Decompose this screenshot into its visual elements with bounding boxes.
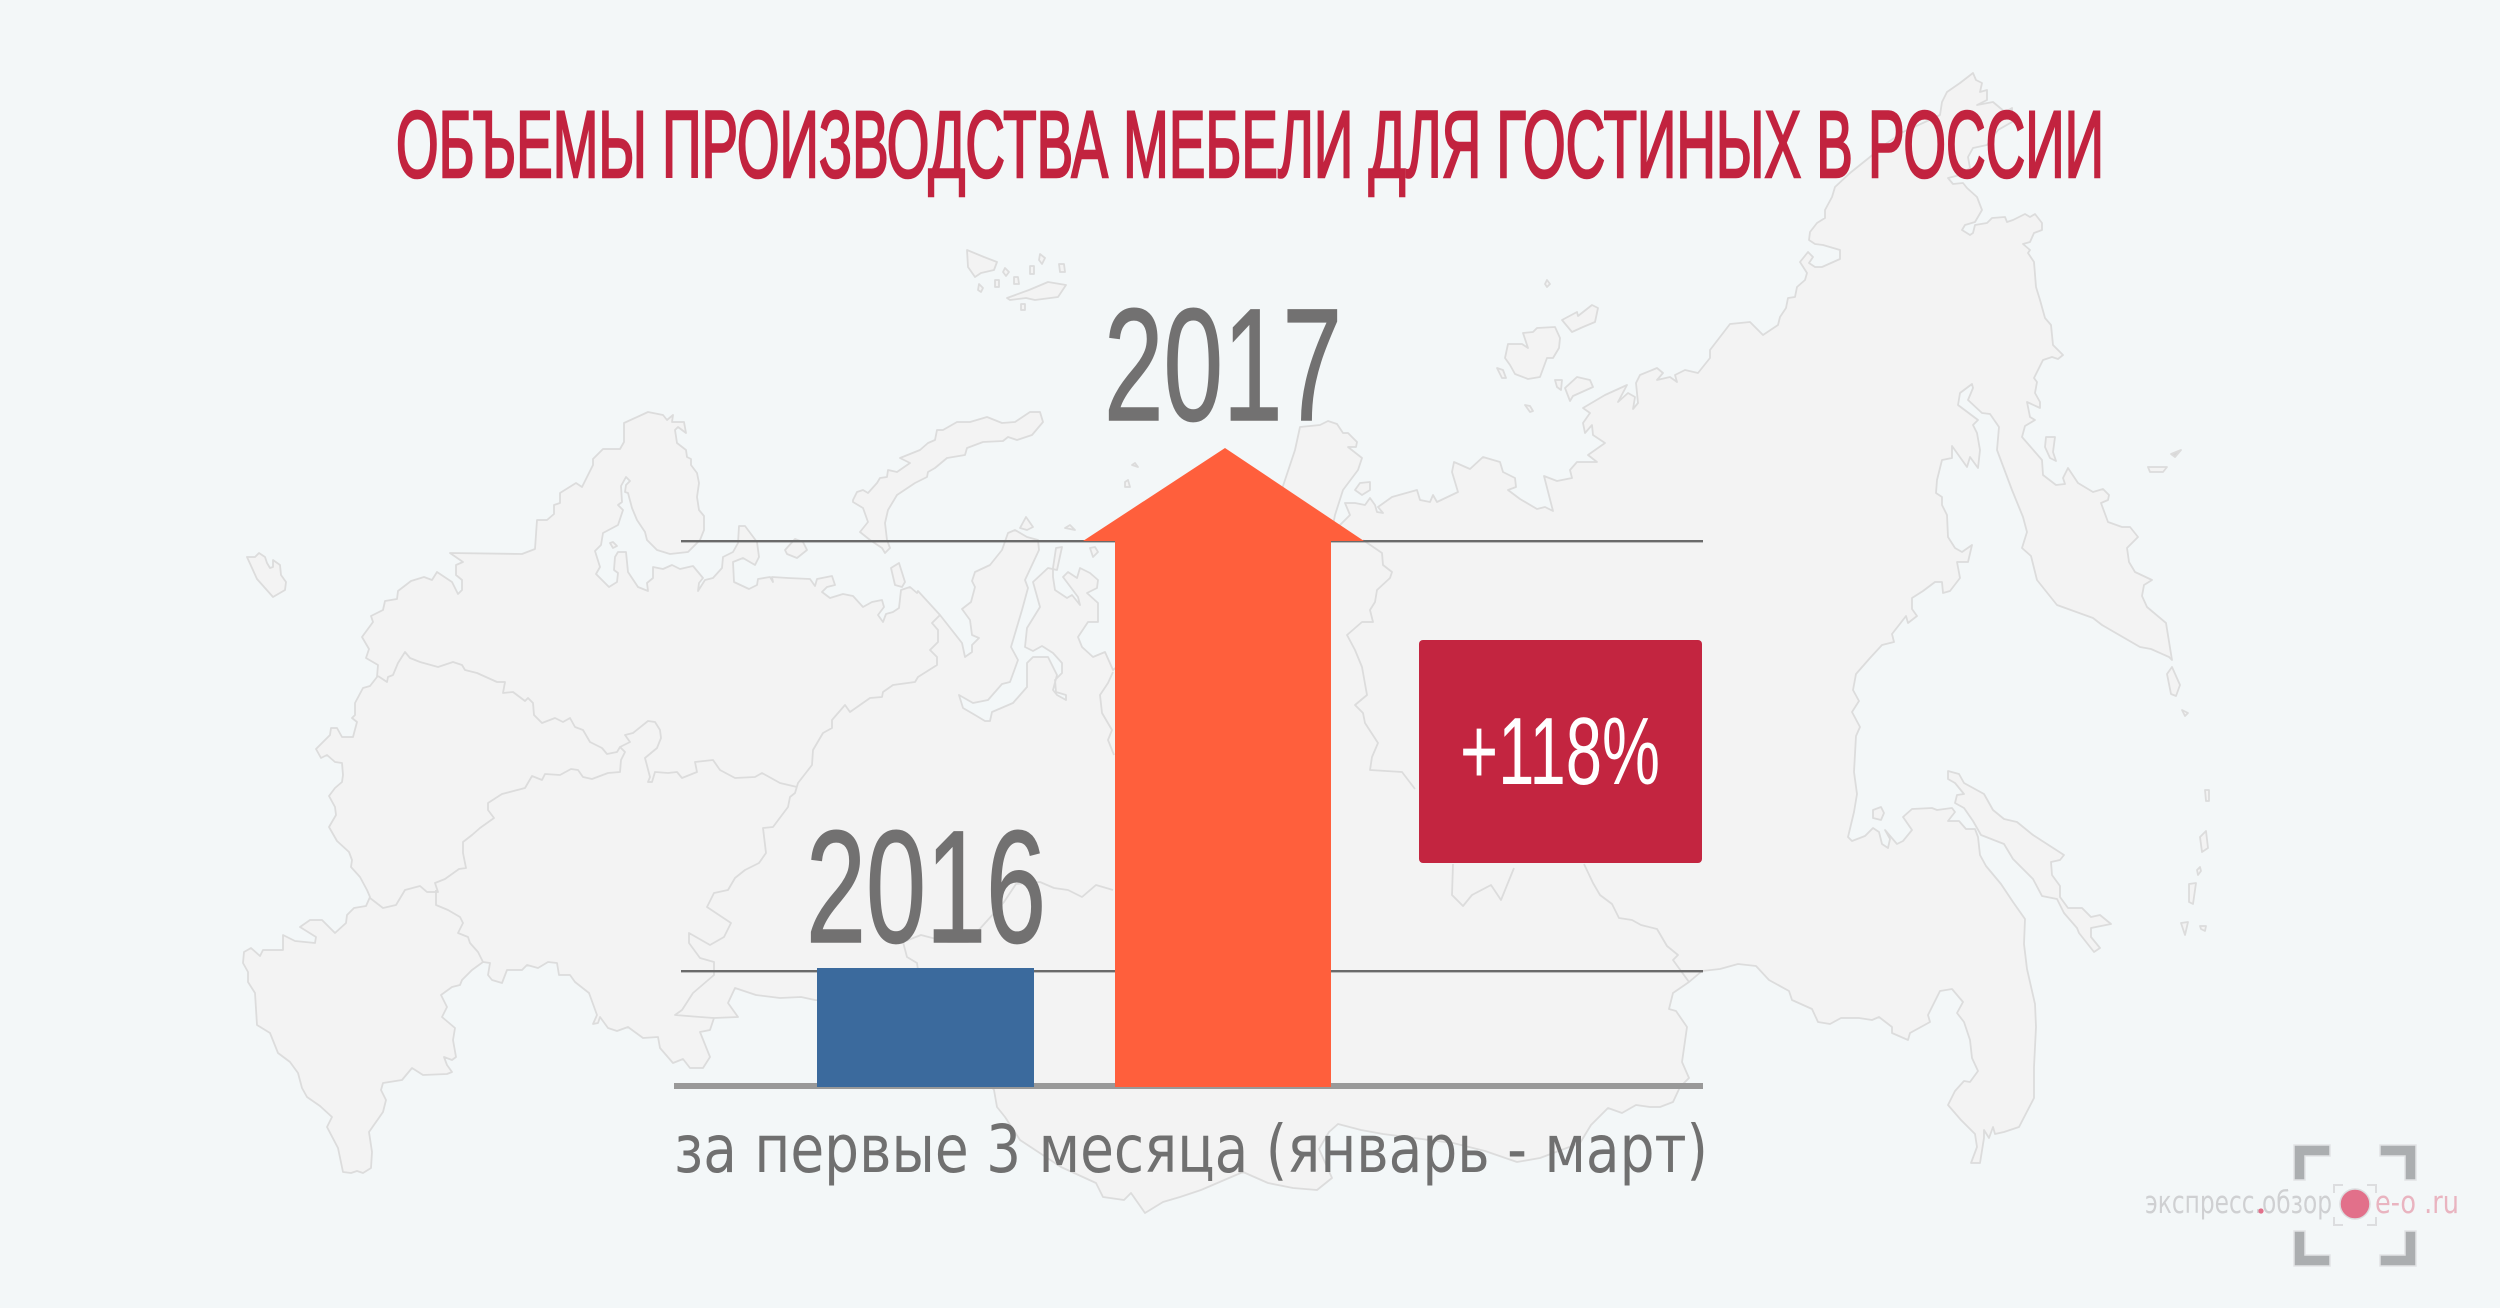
- map: Kaliningrad exclave: [247, 553, 286, 597]
- map: mainland: [243, 73, 2172, 1213]
- map: Novaya Zemlya: [853, 412, 1043, 553]
- period caption: за первые 3 месяца (январь - март): [674, 1111, 1708, 1188]
- arrow bar: 2017 value: [1083, 448, 1364, 1087]
- logo: wordmark left: экспресс.обзор: [2145, 1185, 2332, 1221]
- logo: record circle: [2340, 1189, 2370, 1219]
- year label 2017: 2017: [1104, 275, 1342, 454]
- logo: wordmark right: e-o .ru: [2375, 1185, 2459, 1221]
- map: internal district borders: [370, 540, 1689, 1018]
- chart: 2016 level line: [681, 970, 1703, 972]
- year label 2016: 2016: [806, 797, 1046, 976]
- map: Sakhalin: [1948, 771, 2111, 952]
- logo: corner brackets: [2294, 1145, 2416, 1266]
- map: New Siberian and small Arctic islands: [610, 250, 1598, 587]
- logo: small focus brackets: [2334, 1185, 2376, 1225]
- background map of Russia: [243, 73, 2209, 1213]
- logo: expressobzor: [2145, 1145, 2459, 1266]
- chart: baseline: [674, 1083, 1703, 1089]
- map: Pacific islands and Kurils: [1873, 437, 2209, 935]
- callout: growth percent: [1419, 640, 1702, 863]
- growth value text: +118%: [1460, 698, 1660, 805]
- logo: red dot: [2258, 1208, 2264, 1214]
- bar: 2016 value: [817, 968, 1034, 1087]
- chart: 2017 level line: [681, 540, 1703, 542]
